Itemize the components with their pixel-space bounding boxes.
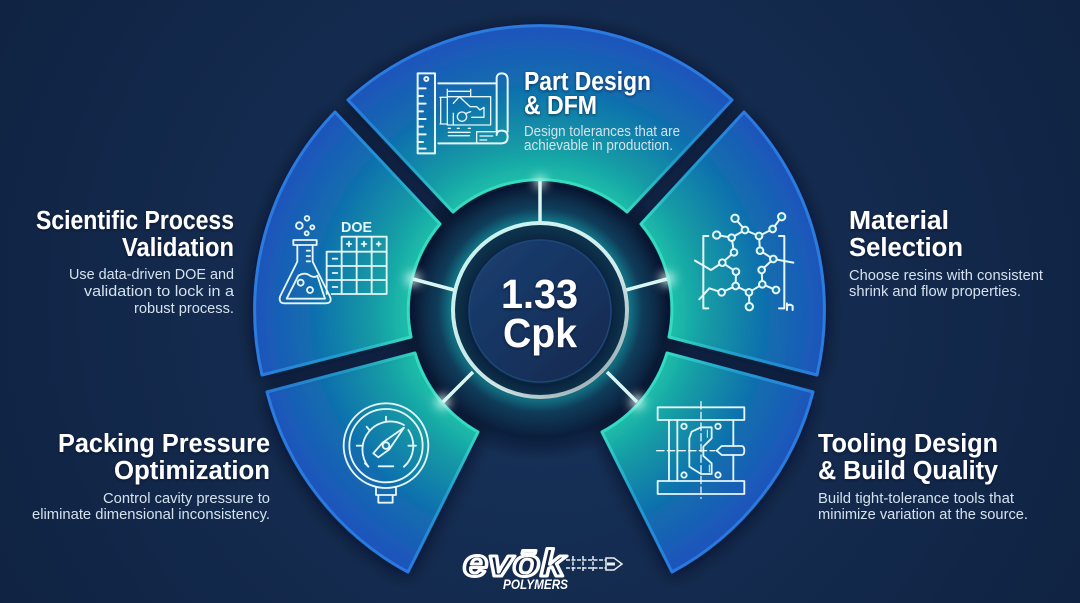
- description line 2: minimize variation at the source.: [818, 507, 1028, 523]
- icon: polymer molecule: [695, 213, 793, 310]
- panel: part design and DFM: [348, 26, 732, 212]
- description line 2: eliminate dimensional inconsistency.: [32, 507, 270, 523]
- logo: evok polymers: [463, 543, 622, 592]
- hub ring: [453, 223, 627, 397]
- central hub backdrop: [390, 160, 690, 460]
- icon: blueprint and ruler: [418, 73, 508, 153]
- description line 1: Choose resins with consistent: [849, 268, 1043, 284]
- value: Cpk: Cpk: [503, 310, 577, 356]
- description line 2: shrink and flow properties.: [849, 284, 1021, 300]
- panel: material selection: [641, 112, 1043, 375]
- description line 1: Control cavity pressure to: [103, 491, 270, 507]
- hub disc: [469, 240, 611, 382]
- description line 1: Build tight-tolerance tools that: [818, 491, 1014, 507]
- logo screw graphic: [566, 556, 622, 572]
- description line 2: validation to lock in a: [84, 284, 235, 300]
- segment shape: [267, 353, 478, 572]
- segment shape: [602, 353, 813, 572]
- logo subtitle: POLYMERS: [503, 576, 569, 592]
- panel: packing pressure optimization: [32, 353, 478, 572]
- heading: material: Material: [849, 207, 949, 235]
- description line 1: Use data-driven DOE and: [69, 267, 234, 283]
- heading: packing pressure: Packing Pressure: [58, 430, 270, 458]
- panel: tooling design and build quality: [602, 353, 1028, 572]
- heading: build quality: & Build Quality: [818, 457, 999, 485]
- segment shape: [348, 26, 732, 212]
- description line 1: Design tolerances that are: [524, 124, 680, 140]
- logo wordmark: evōk: [463, 543, 567, 585]
- heading: scientific process: Scientific Process: [36, 207, 234, 235]
- heading: part design: Part Design: [524, 68, 651, 96]
- icon: injection mold: [657, 402, 744, 498]
- connector spokes: [406, 176, 674, 409]
- icon label: DOE: DOE: [341, 219, 372, 236]
- panel: scientific process validation: [36, 112, 440, 375]
- value: 1.33: 1.33: [501, 271, 578, 317]
- description line 2: achievable in production.: [524, 138, 673, 154]
- icon: pressure gauge: [344, 403, 428, 503]
- segment shape: [255, 112, 440, 375]
- segment shape: [641, 112, 824, 375]
- heading: tooling design: Tooling Design: [818, 430, 998, 458]
- heading: selection: Selection: [849, 234, 963, 262]
- heading: optimization: Optimization: [114, 457, 270, 485]
- icon: flask and DOE table: [280, 216, 387, 303]
- heading: validation: Validation: [122, 234, 234, 262]
- heading: DFM: & DFM: [524, 92, 597, 120]
- center hub: 1.33 Cpk: [453, 223, 627, 397]
- description line 3: robust process.: [134, 301, 234, 317]
